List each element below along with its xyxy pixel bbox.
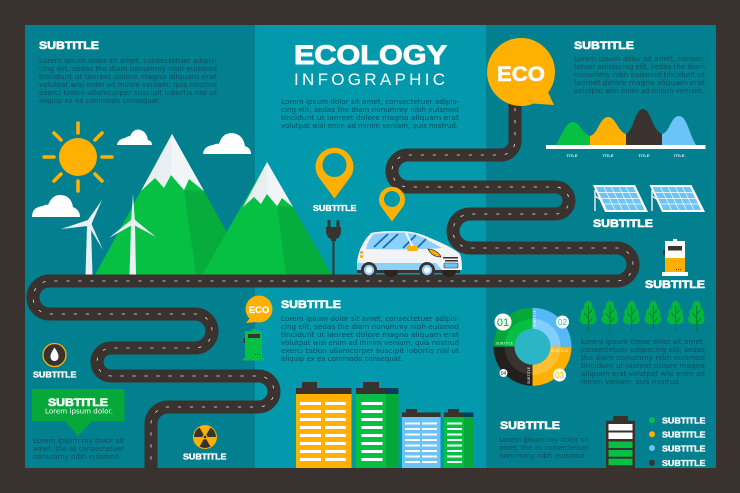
hump dark: [626, 109, 662, 145]
tree 2: [602, 301, 618, 331]
title: ECOLOGY: [294, 40, 447, 70]
icon: power plug: [326, 220, 341, 275]
text block: top left: exerci tation ullamcorper suscipit lobortis nisl ut: [39, 89, 217, 97]
legend item orange: SUBTITLE: [662, 430, 706, 440]
text block: middle: [281, 299, 460, 363]
text block: top left: [39, 40, 218, 105]
car window: [366, 232, 442, 249]
hump orange: [590, 117, 626, 145]
car grille: [443, 257, 458, 262]
chart labels: TITLE: [602, 153, 614, 158]
text block: beside donut: [581, 338, 705, 386]
chart labels: TITLE: [566, 153, 578, 158]
car front wheel: [419, 262, 435, 278]
car headlight: [428, 249, 441, 257]
icon: sun: [44, 123, 112, 191]
text block: top right: volutpat wisi enim ad minim veniam.: [574, 87, 704, 95]
car window stripes: [374, 233, 426, 248]
icon: battery: [606, 416, 635, 469]
text block: bottom right: Lorem ipsum my dolor sit: [499, 436, 589, 444]
text block: under title: [281, 98, 460, 130]
icon: solar panel left: [593, 185, 648, 212]
text block: top left: tincidunt ut laoreet dolore magna aliquam erat: [39, 73, 217, 81]
label: radiation subtitle: SUBTITLE: [183, 452, 226, 462]
badge 04: 04: [501, 371, 506, 377]
text block: bottom left: nonummy nibh euismod.: [33, 453, 121, 461]
text block: bottom left: [33, 437, 124, 461]
text block: top right: tetuer adipiscing elit, sedas the diam: [574, 63, 705, 71]
tree row: [580, 301, 704, 331]
green callout: Lorem ipsum dolor.: [45, 408, 113, 416]
title: [294, 40, 447, 89]
text block: under title: Lorem ipsum dolor sit amet, consectetuer adipis-: [281, 98, 460, 106]
legend item green: SUBTITLE: [662, 416, 706, 426]
text block: beside donut: Lorem ipsum these dolor sit amet,: [581, 338, 705, 346]
legend: [649, 416, 706, 468]
text block: middle: aliquip ex ea commodo consequat.: [281, 355, 403, 363]
segment labels: SUBTITLE: [551, 349, 569, 353]
tree 5: [668, 301, 683, 331]
tree 1: [580, 301, 596, 331]
panel: right column: [486, 25, 716, 468]
mountain: small: [202, 162, 332, 275]
car rear wheel: [361, 262, 377, 278]
road: [33, 100, 633, 470]
text block: under title: cing elit, sedas the diam nonummy nibh euismod: [281, 106, 459, 114]
eco speech bubble: ECO: [497, 63, 545, 86]
text block: top left: volutpat wisi enim ad minim veniam, quis nostrud: [39, 81, 217, 89]
icon: cloud small: [117, 130, 152, 145]
icon: wind turbine right: [109, 194, 156, 275]
icon: radiation: [193, 425, 217, 449]
text block: bottom left: amet, the as consectetuer: [33, 445, 124, 453]
mountain: large: [95, 134, 250, 275]
text block: top left: aliquip ex ea commodo consequat.: [39, 97, 161, 105]
text block: top left: SUBTITLE: [39, 40, 99, 52]
title: INFOGRAPHIC: [294, 70, 445, 89]
tree 6: [689, 301, 704, 331]
text block: bottom right: [499, 420, 589, 460]
text block: top left: cing elit, sedas the diam nonummy nibh euismod: [39, 65, 217, 73]
text block: top right: SUBTITLE: [574, 40, 634, 52]
text block: middle: exerci tation ullamcorper suscipit lobortis nisl ut: [281, 347, 459, 355]
building: blue: [402, 409, 440, 468]
building: orange: [296, 382, 352, 468]
donut chart: [494, 308, 572, 386]
icon: cloud right: [203, 133, 251, 154]
area chart: [546, 109, 706, 158]
icon: water drop: [43, 344, 66, 366]
text block: beside donut: aliquam erat volutpat wisi enim ad: [581, 370, 705, 378]
car: [357, 231, 462, 278]
label: charging subtitle: SUBTITLE: [645, 279, 705, 291]
badge 03: 03: [555, 371, 564, 380]
text block: beside donut: tincidunt ut laoreet dolore magna: [581, 362, 705, 370]
panel: center column: [255, 25, 486, 468]
segment labels: SUBTITLE: [527, 366, 531, 384]
icon: eco bubble small: ECO: [249, 305, 269, 316]
panel: left column: [25, 25, 255, 468]
text block: top left: Lorem ipsum dolor sit amet, consectetuer adipis-: [39, 57, 218, 65]
car body: [357, 231, 462, 270]
legend item dark: SUBTITLE: [662, 459, 706, 468]
text block: bottom right: nonummy nibh euismod.: [499, 452, 587, 460]
label: solar subtitle: SUBTITLE: [593, 218, 653, 230]
icon: location pin small: [379, 187, 405, 222]
building: tall green: [356, 382, 398, 468]
icon: location pin large: [316, 148, 354, 198]
text block: bottom right: amet, the as consectetuer: [499, 444, 589, 452]
text block: under title: volutpat wisi enim ad minim veniam, quis nostrud.: [281, 122, 458, 130]
donut center: [514, 329, 550, 365]
chart labels: [566, 153, 685, 158]
chart labels: TITLE: [638, 153, 650, 158]
text block: middle: tincidunt ut laoreet dolore magna aliquam erat: [281, 331, 459, 339]
segment labels: SUBTITLE: [496, 342, 514, 346]
hump green: [556, 122, 590, 145]
text block: bottom left: Lorem ipsum my dolor sit: [33, 437, 124, 445]
text block: beside donut: minim veniam, quis nostrud.: [581, 378, 681, 386]
car tail lights: [360, 251, 363, 258]
badge 01: 01: [497, 317, 509, 329]
building: small green: [444, 409, 474, 468]
text block: middle: cing elit, sedas the diam nonummy nibh euismod: [281, 323, 459, 331]
label: pin subtitle: SUBTITLE: [313, 204, 356, 213]
text block: top right: laoreet dolore magna aliquam erat: [574, 79, 705, 87]
chart labels: TITLE: [673, 153, 685, 158]
legend item blue: SUBTITLE: [662, 444, 706, 453]
segment labels: SUBTITLE: [533, 309, 537, 327]
segment 02 blue: [532, 308, 572, 347]
icon: cloud left: [32, 195, 80, 217]
tree 4: [645, 301, 661, 331]
text block: top right: nonummy nibh euismod tincidunt ut: [574, 71, 705, 79]
icon: charging station orange: [662, 239, 688, 276]
green callout: [32, 389, 124, 436]
text block: bottom right: SUBTITLE: [500, 420, 560, 432]
tree 3: [624, 301, 639, 331]
car lower stripe: [357, 263, 442, 270]
chart baseline: [546, 145, 706, 149]
icon: solar panel right: [650, 185, 705, 212]
text block: beside donut: the diam nonummy nibh euismod: [581, 354, 705, 362]
segment 04 dark: [494, 347, 532, 386]
icon: charging station green: [243, 329, 264, 360]
badge 02: 02: [558, 318, 567, 327]
segment 01 green: [494, 308, 532, 347]
text block: top right: [574, 40, 706, 95]
eco speech bubble: [487, 38, 555, 106]
text block: top right: Lorem ipsum dolor sit amet, consec-: [574, 55, 706, 63]
car chassis and shadow wheels: [357, 269, 460, 273]
text block: beside donut: consectetuer adipiscing elit, sedas: [581, 346, 705, 354]
segment labels: [496, 309, 569, 384]
car mirror: [407, 246, 418, 251]
icon: wind turbine left: [61, 200, 103, 275]
text block: under title: tincidunt ut laoreet dolore magna aliquam erat: [281, 114, 459, 122]
green callout: SUBTITLE: [48, 397, 108, 409]
segment 03 orange: [532, 347, 572, 386]
text block: middle: Lorem ipsum dolor sit amet, consectetuer adipis-: [281, 315, 460, 323]
hump blue: [662, 116, 696, 145]
label: water subtitle: SUBTITLE: [33, 370, 76, 380]
text block: middle: volutpat wisi enim ad minim veniam, quis nostrud: [281, 339, 459, 347]
text block: middle: SUBTITLE: [281, 299, 341, 311]
icon: eco bubble small: [246, 296, 272, 323]
